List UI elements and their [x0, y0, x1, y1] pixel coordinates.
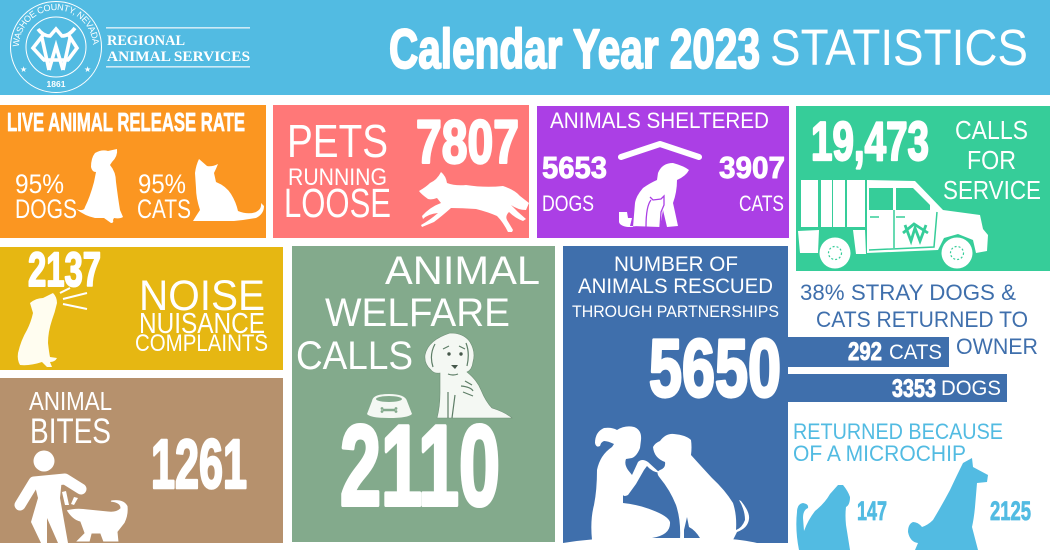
label: FOR — [967, 145, 1016, 175]
panel: animal welfare calls — [292, 246, 555, 542]
icon: blue cat — [796, 485, 850, 550]
icon: sitting cat — [193, 159, 264, 221]
cats rate: CATS — [137, 194, 191, 224]
panel: pets running loose — [273, 105, 529, 238]
heading: ANIMALS SHELTERED — [550, 108, 769, 133]
logo wordmark: ANIMAL SERVICES — [107, 49, 250, 65]
number: 2137 — [28, 244, 101, 297]
label — [284, 115, 391, 226]
number: 7807 — [416, 108, 519, 176]
panel: live animal release rate — [0, 105, 266, 238]
title: Calendar Year 2023 — [389, 17, 760, 80]
dogs rate: 95% — [15, 169, 64, 199]
panel: calls for service — [796, 106, 1050, 271]
logo: Washoe County seal: 1861 — [47, 79, 66, 89]
dogs rate — [15, 169, 77, 224]
cats sheltered — [719, 150, 785, 216]
label: NUISANCE — [139, 308, 265, 340]
icon: running dog — [419, 172, 529, 232]
heading: NUMBER OF — [614, 253, 738, 276]
number: cats microchip: 147 — [857, 496, 887, 526]
text: returned because of a microchip: RETURNED BECAUSE — [793, 419, 1003, 444]
label: ANIMAL — [29, 386, 112, 416]
text: stray dogs and cats returned to owner: OWNER — [956, 334, 1038, 359]
number: 5650 — [649, 323, 781, 414]
label: RUNNING — [288, 164, 387, 191]
text: returned because of a microchip: OF A MICROCHIP — [793, 441, 966, 466]
heading — [572, 253, 779, 321]
logo: Washoe County seal: WASHOE COUNTY, NEVADA — [12, 4, 99, 46]
label: CALLS — [955, 115, 1028, 145]
label: PETS — [287, 115, 388, 167]
title: statistics: STATISTICS — [770, 19, 1028, 76]
label: CALLS — [296, 334, 413, 378]
icon: dog and cat — [619, 163, 689, 227]
heading: THROUGH PARTNERSHIPS — [572, 302, 779, 321]
number: dogs microchip: 2125 — [990, 496, 1031, 526]
bar: dogs returned — [785, 374, 1007, 403]
icon: animal control truck — [798, 180, 988, 268]
panel: animal bites — [0, 378, 283, 543]
logo: Washoe County seal — [10, 1, 102, 93]
icon: shelter roof — [621, 144, 699, 157]
label: LOOSE — [284, 180, 391, 226]
label — [135, 272, 268, 357]
logo: Washoe County seal: ★ — [20, 65, 27, 74]
icon: sitting dog — [76, 149, 123, 223]
panel: animals sheltered — [537, 106, 789, 238]
bar: cats returned: CATS — [889, 341, 942, 364]
bar: cats returned: 292 — [848, 338, 882, 366]
dogs sheltered — [542, 150, 607, 216]
dogs sheltered: DOGS — [542, 191, 594, 216]
icon: person bitten by dog — [20, 450, 128, 543]
text: stray dogs and cats returned to owner: 38% STRAY DOGS & — [800, 280, 1016, 305]
cats rate — [137, 169, 191, 224]
text: stray dogs and cats returned to owner: CATS RETURNED TO — [816, 307, 1028, 332]
cats sheltered: CATS — [739, 191, 784, 216]
text: stray dogs and cats returned to owner — [800, 280, 1038, 359]
panel: animals rescued through partnerships — [563, 246, 788, 543]
label — [29, 386, 112, 451]
logo: Washoe County seal: ★ — [84, 65, 91, 74]
heading: ANIMALS RESCUED — [578, 275, 773, 298]
cats rate: 95% — [138, 169, 186, 199]
heading: LIVE ANIMAL RELEASE RATE — [7, 107, 245, 137]
icon: barking dog — [18, 288, 87, 367]
text: returned because of a microchip — [793, 419, 1003, 466]
icon: food bowl — [367, 394, 412, 418]
icon: sad dog — [425, 333, 512, 418]
header band — [0, 0, 1050, 95]
number: 2110 — [340, 403, 500, 530]
logo wordmark: REGIONAL — [107, 33, 185, 49]
cats sheltered: 3907 — [719, 150, 785, 185]
label: NOISE — [139, 272, 265, 320]
bar: cats returned — [785, 337, 949, 367]
label: WELFARE — [325, 291, 510, 335]
label: BITES — [30, 412, 111, 451]
panel: noise nuisance complaints — [0, 244, 283, 370]
label — [296, 249, 540, 378]
label: COMPLAINTS — [135, 330, 268, 357]
icon: blue dog — [908, 458, 988, 550]
dogs sheltered: 5653 — [542, 150, 607, 185]
number: 19,473 — [811, 110, 929, 172]
logo wordmark — [106, 27, 250, 68]
bar: dogs returned: 3353 — [892, 375, 936, 403]
label — [943, 115, 1041, 205]
bar: dogs returned: DOGS — [941, 377, 1001, 400]
icon: girl and dog silhouette — [563, 426, 757, 543]
label: ANIMAL — [385, 249, 540, 293]
dogs rate: DOGS — [15, 194, 77, 224]
number: 1261 — [151, 425, 247, 503]
